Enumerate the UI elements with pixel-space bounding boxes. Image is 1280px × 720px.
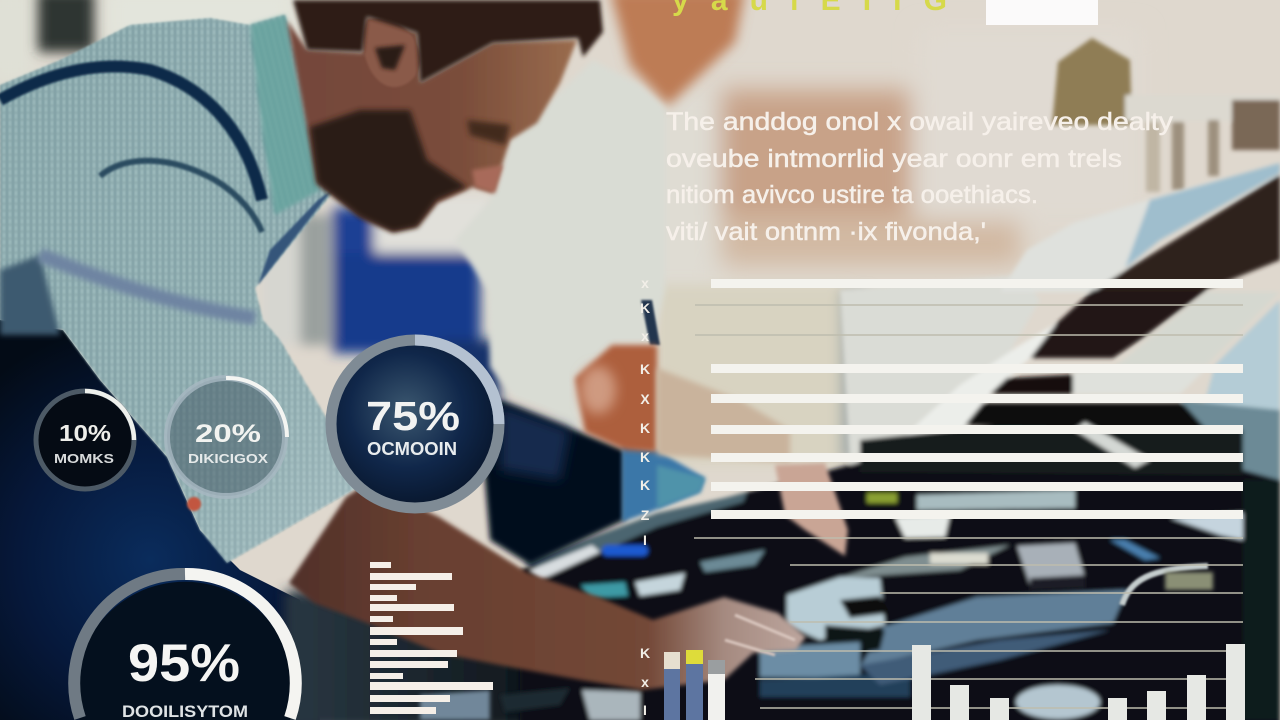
donut: 95% xyxy=(74,574,296,720)
axis tick marks: K xyxy=(640,361,650,377)
axis tick marks: K xyxy=(640,420,650,436)
second person: shirt, arm and raised hand xyxy=(455,0,848,565)
axis tick marks: I xyxy=(643,532,647,548)
axis tick marks: x xyxy=(641,674,649,690)
vertical bar chart, right xyxy=(912,644,1245,720)
donut: 75%: 75% xyxy=(366,393,460,439)
dark lower left xyxy=(0,320,320,720)
axis tick marks: x xyxy=(641,328,649,344)
axis tick marks: K xyxy=(640,645,650,661)
donut: 10%: MOMKS xyxy=(54,451,114,466)
white banner xyxy=(986,0,1098,25)
axis tick marks: K xyxy=(640,449,650,465)
stacked bars, left xyxy=(664,650,725,720)
paragraph text: The anddog onol x owail yaireveo dealty xyxy=(666,108,1174,136)
mechanic: patterned shirt xyxy=(0,15,365,563)
lower dark band under arm xyxy=(285,590,555,720)
mechanic: forearm and hand xyxy=(289,483,806,690)
axis tick marks xyxy=(640,275,650,718)
donut: 10% xyxy=(36,391,134,489)
axis tick marks: K xyxy=(640,477,650,493)
paragraph text xyxy=(666,108,1174,246)
axis tick marks: X xyxy=(640,391,650,407)
horizontal line chart rows xyxy=(694,279,1243,709)
paragraph text: viti/ vait ontnm ·ix fivonda,' xyxy=(666,218,986,246)
axis tick marks: K xyxy=(640,300,650,316)
donut: 20%: 20% xyxy=(195,420,261,448)
axis tick marks: Z xyxy=(641,507,650,523)
donut: 20%: DIKICIGOX xyxy=(188,451,268,466)
paragraph text: oveube intmorrlid year oonr em trels xyxy=(666,145,1122,173)
axis tick marks: I xyxy=(643,702,647,718)
donut: 10%: 10% xyxy=(59,420,111,446)
donut: 75%: OCMOOIN xyxy=(367,439,457,459)
axis tick marks: x xyxy=(641,275,649,291)
donut: 75% xyxy=(331,340,499,508)
dome and railing xyxy=(1052,38,1280,192)
donut: 95%: 95% xyxy=(128,634,240,693)
engine bay base xyxy=(420,163,1280,720)
donut: 20% xyxy=(167,378,287,496)
mechanic: head and hair xyxy=(287,0,603,232)
horizontal mini bars xyxy=(370,562,493,714)
paragraph text: nitiom avivco ustire ta ooethiacs. xyxy=(666,181,1038,209)
